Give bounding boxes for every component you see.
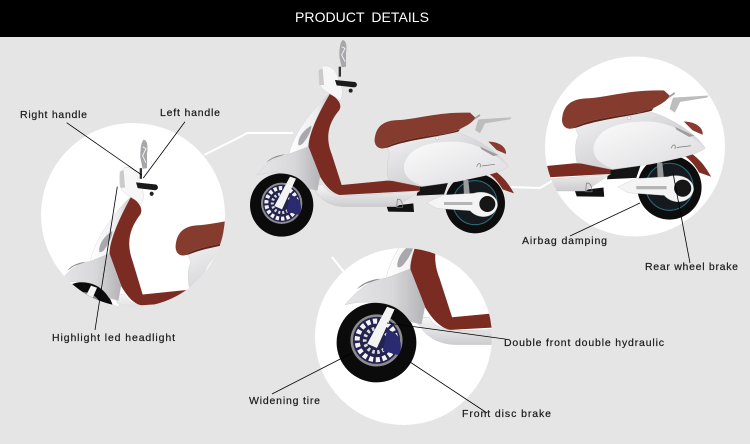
panel: front wheel detail circle bbox=[315, 248, 492, 425]
label: highlight led headlight: Highlight led headlight bbox=[52, 332, 175, 344]
connector: left circle to main scooter bbox=[204, 133, 293, 155]
label: left handle: Left handle bbox=[160, 107, 220, 119]
leader line: widening tire bbox=[272, 353, 352, 394]
label: widening tire: Widening tire bbox=[249, 395, 320, 407]
leader line: rear wheel brake bbox=[673, 173, 690, 263]
label: rear wheel brake: Rear wheel brake bbox=[645, 261, 738, 273]
leader line: front disc brake bbox=[410, 362, 487, 413]
connector: main scooter to right circle bbox=[507, 181, 552, 188]
title: PRODUCT DETAILS bbox=[295, 9, 429, 25]
main scooter illustration bbox=[250, 40, 514, 237]
leader line: left handle bbox=[143, 122, 185, 178]
header bar bbox=[0, 0, 750, 37]
leader line: headlight bbox=[95, 187, 117, 330]
label: double front double hydraulic: Double front double hydraulic bbox=[504, 337, 664, 349]
panel: rear detail circle bbox=[545, 56, 725, 236]
connector: main scooter to bottom circle bbox=[332, 257, 344, 272]
leader line: double front hydraulic bbox=[387, 323, 505, 339]
leader line: airbag damping bbox=[570, 203, 640, 236]
panel: handle and headlight detail circle bbox=[41, 123, 225, 306]
label: airbag damping: Airbag damping bbox=[522, 235, 607, 247]
leader line: right handle bbox=[67, 123, 142, 175]
label: right handle: Right handle bbox=[20, 109, 87, 121]
label: front disc brake: Front disc brake bbox=[462, 408, 551, 420]
